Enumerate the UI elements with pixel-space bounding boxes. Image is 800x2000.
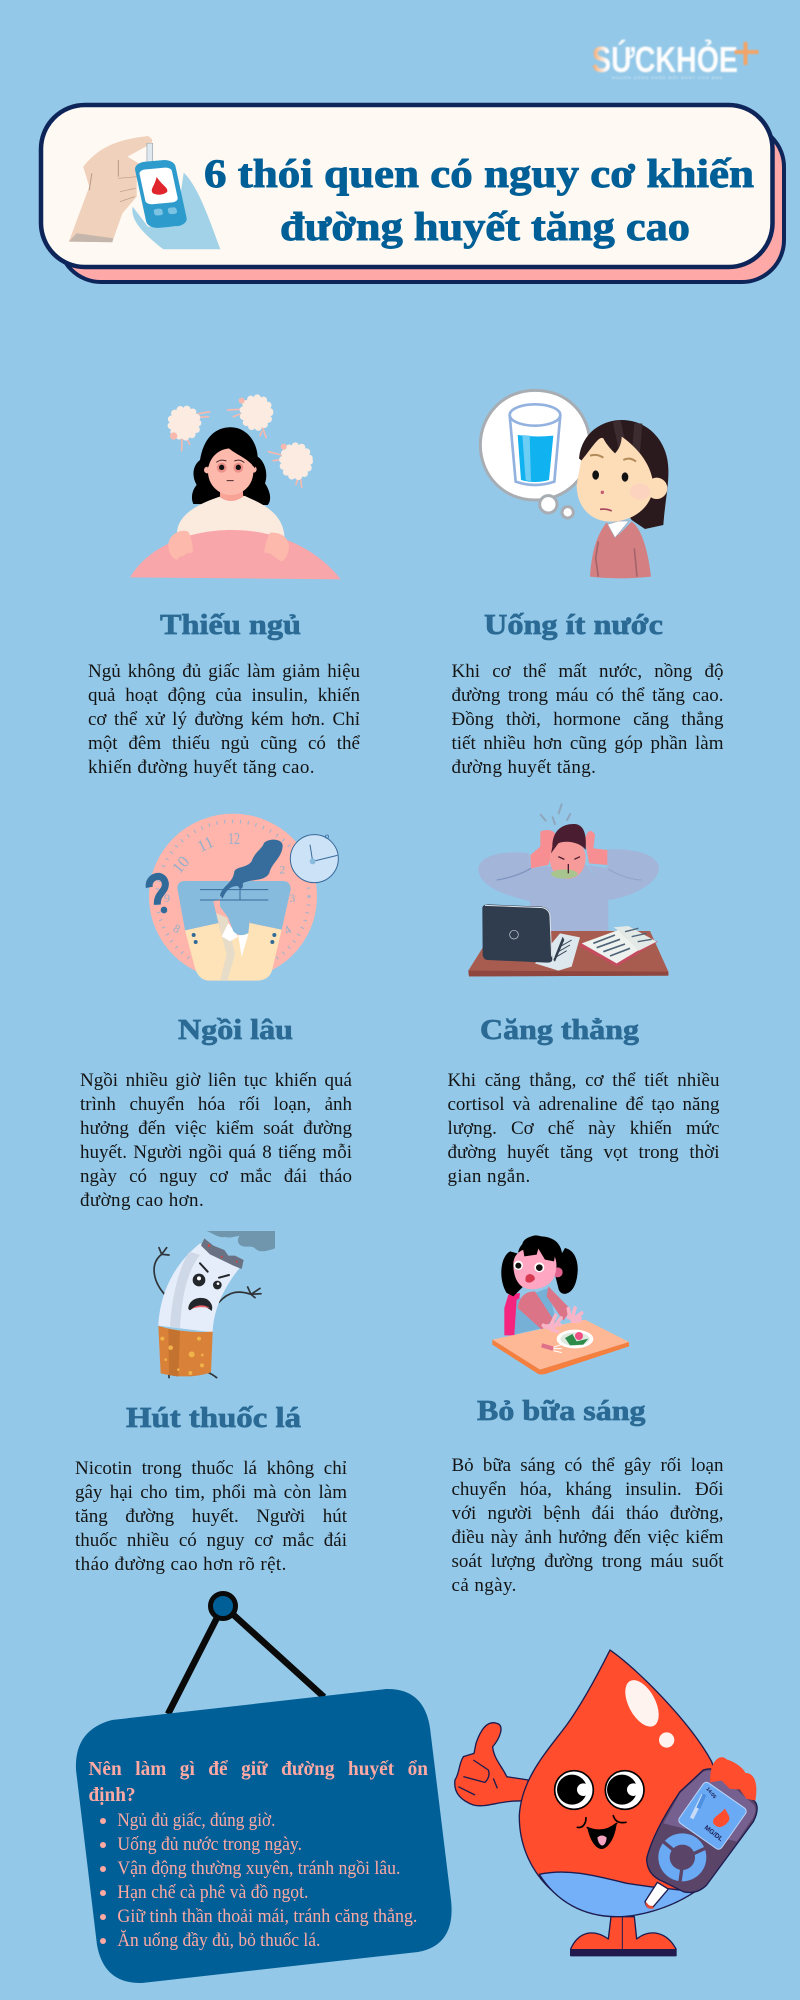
text block: tăng đường huyết. Người hút bbox=[75, 1506, 347, 1527]
banner background card bbox=[38, 102, 786, 284]
text block bbox=[448, 1070, 720, 1187]
text block: gây hại cho tim, phổi mà còn làm bbox=[75, 1482, 347, 1503]
illustration: person at a giant clock: 2 bbox=[279, 862, 285, 876]
text block bbox=[452, 661, 724, 778]
hanging cord and pin bbox=[168, 1594, 324, 1714]
text block: cortisol và adrenaline để tạo năng bbox=[448, 1094, 720, 1115]
text block bbox=[80, 1070, 352, 1211]
text block: thuốc nhiều có nguy cơ mắc đái bbox=[75, 1530, 347, 1551]
advice list: Vận động thường xuyên, tránh ngồi lâu. bbox=[117, 1858, 400, 1879]
illustration: stressed man at laptop bbox=[468, 803, 668, 976]
title text: 6 thói quen có nguy cơ khiến bbox=[204, 151, 754, 196]
illustration: person at a giant clock: 12 bbox=[228, 829, 240, 848]
text block: điều này ảnh hưởng đến việc kiểm bbox=[452, 1527, 724, 1548]
text block: soát lượng đường trong máu suốt bbox=[452, 1551, 724, 1572]
panel: Hút thuốc lá bbox=[75, 1231, 347, 1575]
text block: trình chuyển hóa rối loạn, ảnh bbox=[80, 1094, 352, 1115]
panel: Thiếu ngủ bbox=[88, 394, 360, 778]
sign heading bbox=[88, 1758, 428, 1806]
illustration: person at a giant clock: 10 bbox=[168, 852, 193, 877]
advice list: Ăn uống đầy đủ, bỏ thuốc lá. bbox=[117, 1930, 320, 1951]
illustration: blood drop mascot with glucose meter: MG/DL bbox=[703, 1824, 724, 1843]
text block: một đêm thiếu ngủ cũng có thể bbox=[88, 733, 360, 754]
icon: hand holding glucose meter bbox=[69, 136, 220, 250]
sign heading: Nên làm gì để giữ đường huyết ổn bbox=[88, 1758, 428, 1780]
text block: đường huyết tăng vọt trong thời bbox=[448, 1142, 720, 1163]
text block: Ngồi nhiều giờ liên tục khiến quá bbox=[80, 1070, 352, 1091]
illustration: blood drop mascot with glucose meter bbox=[454, 1649, 758, 1956]
advice list: Uống đủ nước trong ngày. bbox=[117, 1834, 302, 1855]
advice list: Hạn chế cà phê và đồ ngọt. bbox=[117, 1882, 308, 1903]
text block: Bỏ bữa sáng có thể gây rối loạn bbox=[452, 1455, 724, 1476]
text block: khiến đường huyết tăng cao. bbox=[88, 757, 315, 778]
text block: cơ thể xử lý đường kém hơn. Chỉ bbox=[88, 709, 360, 730]
sign board bbox=[76, 1689, 452, 1983]
illustration: person at a giant clock bbox=[146, 814, 339, 981]
text block: đường huyết tăng. bbox=[452, 757, 596, 778]
text block: Nicotin trong thuốc lá không chỉ bbox=[75, 1458, 347, 1479]
logo: Sức Khỏe+: SỨCKHỎE bbox=[592, 38, 738, 80]
heading: Thiếu ngủ bbox=[160, 609, 301, 641]
text block: với người bệnh đái tháo đường, bbox=[452, 1503, 724, 1524]
heading: Căng thẳng bbox=[480, 1014, 640, 1046]
text block: chuyển hóa, kháng insulin. Đối bbox=[452, 1479, 724, 1500]
text block: đường trong máu có thể tăng cao. bbox=[452, 685, 724, 706]
text block: lượng. Cơ chế này khiến mức bbox=[448, 1118, 720, 1139]
panel: Căng thẳng bbox=[448, 803, 720, 1187]
panel: Ngồi lâu bbox=[80, 814, 352, 1211]
text block: gian ngắn. bbox=[448, 1166, 531, 1187]
illustration: blood drop mascot with glucose meter: 14:05 bbox=[704, 1786, 717, 1800]
heading: Ngồi lâu bbox=[178, 1014, 293, 1046]
panel: Uống ít nước bbox=[452, 388, 724, 778]
illustration: person at a giant clock: 4 bbox=[281, 922, 294, 937]
illustration: girl refusing breakfast bbox=[492, 1235, 629, 1374]
text block: quả hoạt động của insulin, khiến bbox=[88, 685, 360, 706]
text block: tháo đường cao hơn rõ rệt. bbox=[75, 1554, 287, 1575]
title text: đường huyết tăng cao bbox=[280, 204, 690, 249]
advice list: Ngủ đủ giấc, đúng giờ. bbox=[117, 1810, 275, 1831]
sign heading: định? bbox=[88, 1784, 136, 1806]
text block: hưởng đến việc kiểm soát đường bbox=[80, 1118, 352, 1139]
text block: Đồng thời, hormone căng thẳng bbox=[452, 709, 724, 730]
illustration: person at a giant clock: 11 bbox=[194, 832, 217, 856]
logo: Sức Khỏe+: NGUỒN SỐNG KHỎE MỖI NGÀY CHO BẠN bbox=[612, 75, 722, 80]
text block: Khi cơ thể mất nước, nồng độ bbox=[452, 661, 724, 682]
text block: cả ngày. bbox=[452, 1575, 517, 1596]
illustration: person at a giant clock: 3 bbox=[289, 891, 295, 905]
text block: đường cao hơn. bbox=[80, 1190, 204, 1211]
panel: Bỏ bữa sáng bbox=[452, 1235, 724, 1596]
text block: Ngủ không đủ giấc làm giảm hiệu bbox=[88, 661, 360, 682]
heading: Hút thuốc lá bbox=[126, 1402, 302, 1434]
text block bbox=[88, 661, 360, 778]
heading: Bỏ bữa sáng bbox=[476, 1395, 646, 1427]
text block: tiết nhiều hơn cũng góp phần làm bbox=[452, 733, 724, 754]
text block bbox=[452, 1455, 724, 1596]
panel: advice sign bbox=[76, 1591, 452, 1983]
text block: Khi căng thẳng, cơ thể tiết nhiều bbox=[448, 1070, 720, 1091]
illustration: angry cigarette bbox=[153, 1231, 275, 1378]
title banner bbox=[38, 102, 786, 284]
text block: huyết. Người ngồi quá 8 tiếng mỗi bbox=[80, 1142, 352, 1163]
title text bbox=[204, 151, 754, 249]
illustration: sleepless woman with sheep bbox=[130, 394, 340, 580]
illustration: thirsty girl thinking of a glass of water bbox=[478, 388, 668, 578]
advice list bbox=[100, 1810, 417, 1951]
heading: Uống ít nước bbox=[484, 609, 663, 641]
advice list: Giữ tinh thần thoải mái, tránh căng thẳng. bbox=[117, 1906, 417, 1927]
text block bbox=[75, 1458, 347, 1575]
text block: ngày có nguy cơ mắc đái tháo bbox=[80, 1166, 352, 1187]
illustration: person at a giant clock: 8 bbox=[171, 921, 183, 936]
illustration: person at a giant clock: 9 bbox=[164, 891, 170, 905]
